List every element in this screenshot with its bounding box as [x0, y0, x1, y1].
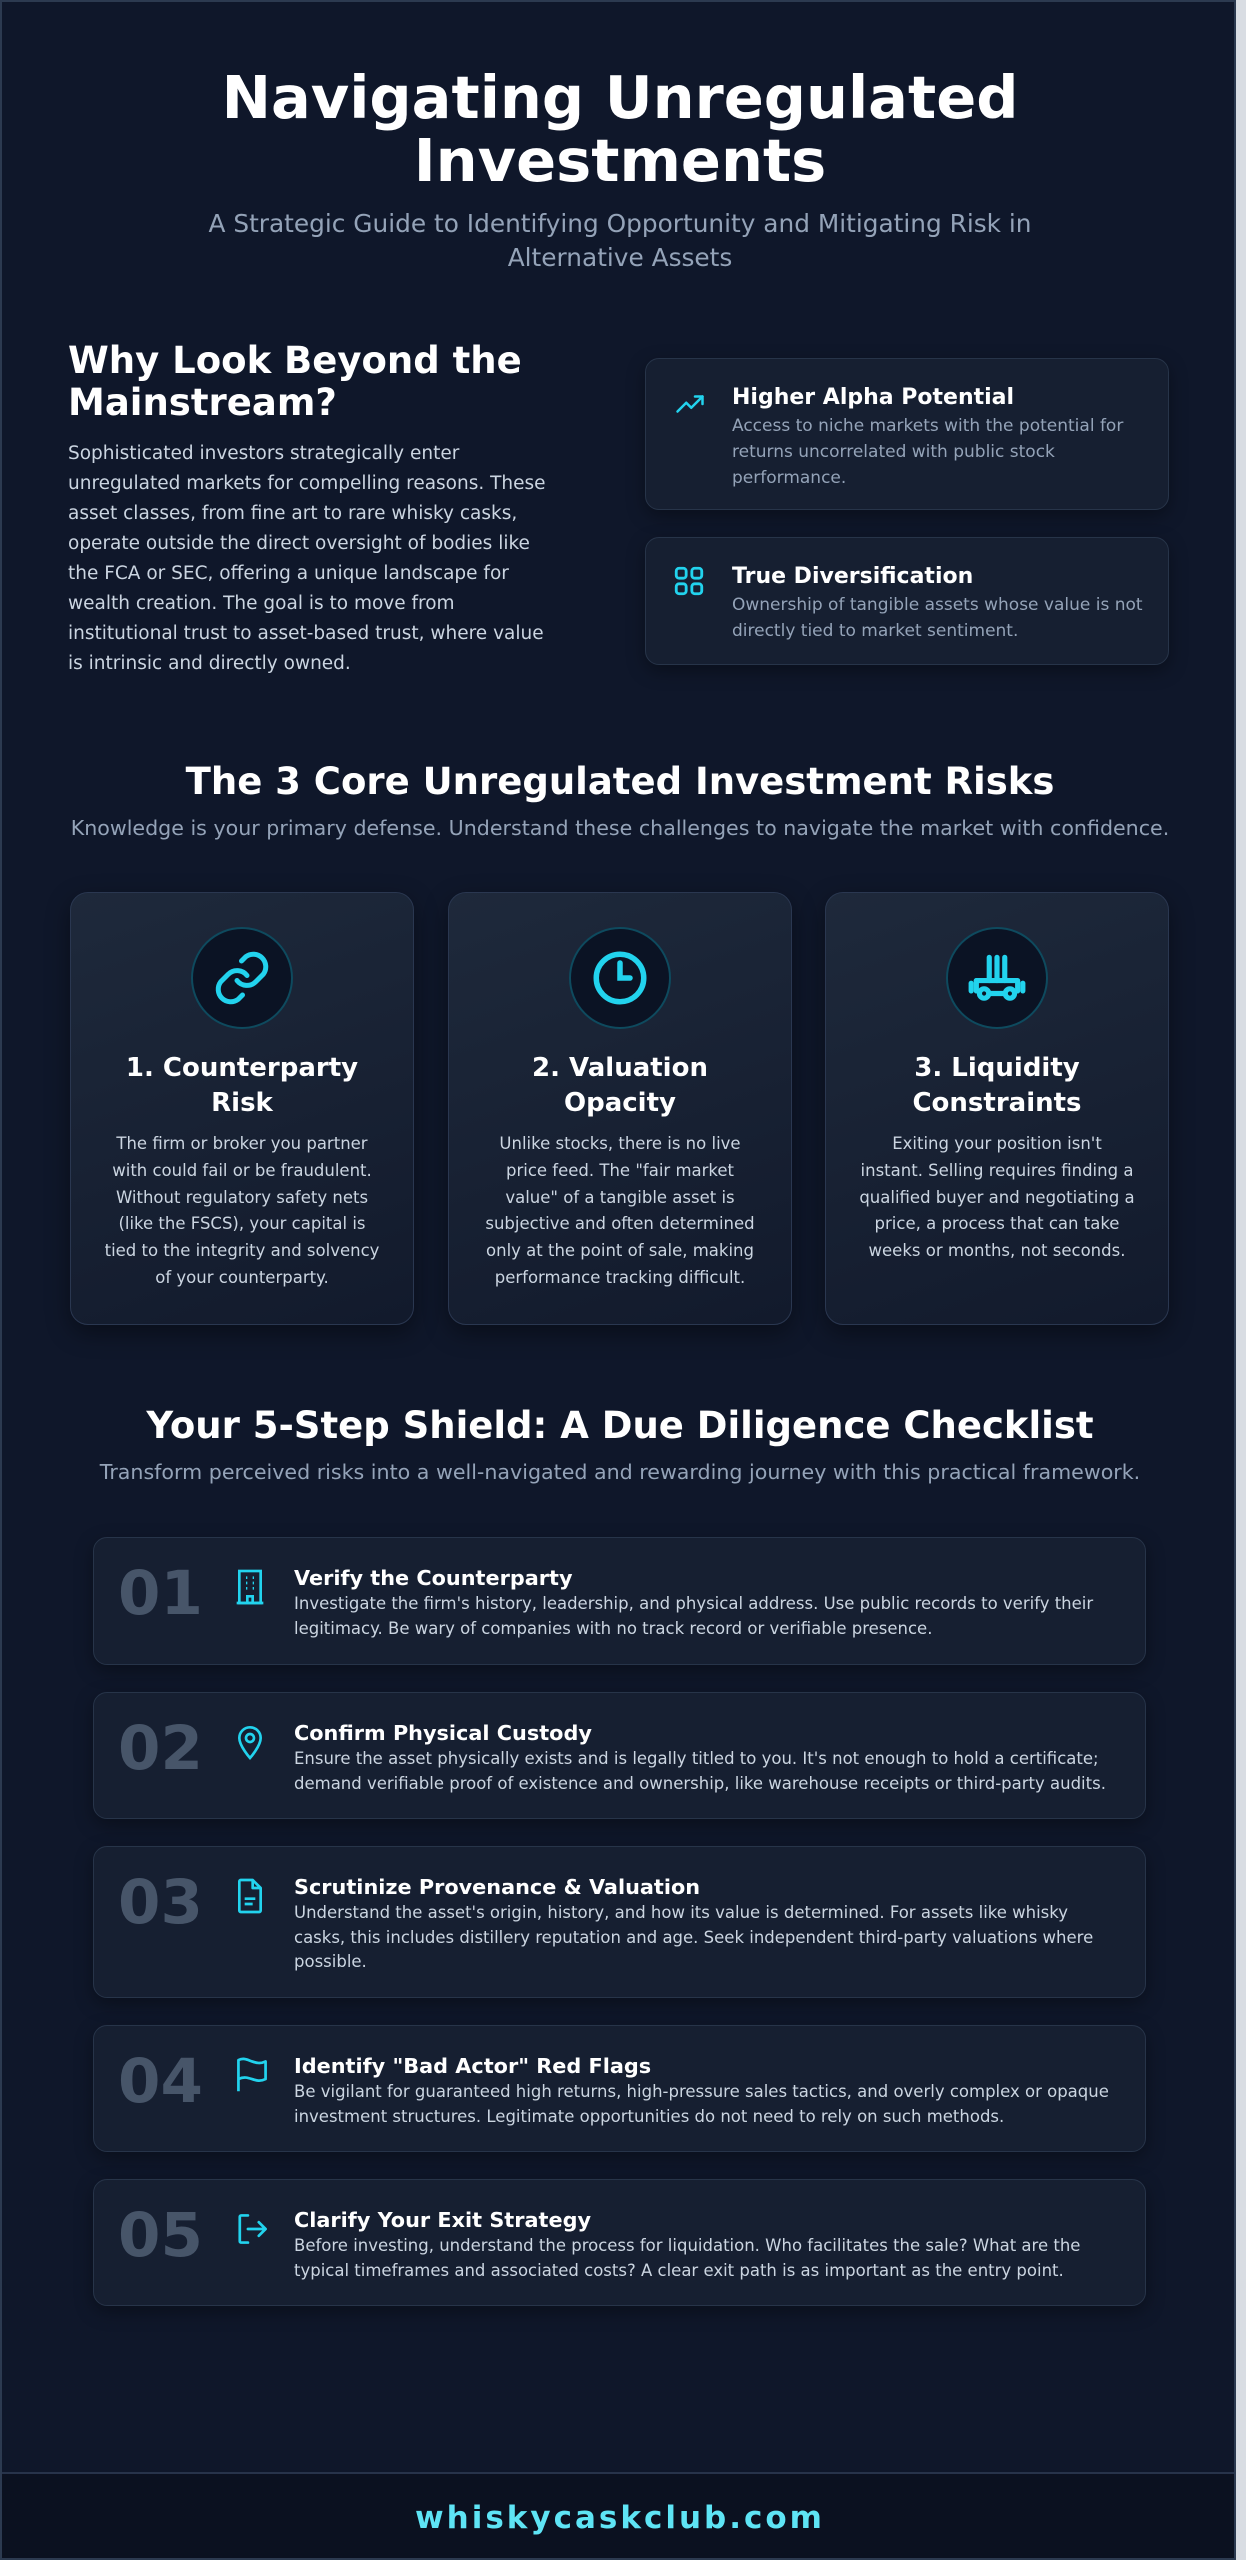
- text: Exiting your position isn't: [892, 1134, 1102, 1153]
- footer: [2, 2472, 1238, 2560]
- step 03: [93, 1846, 1146, 1998]
- icon: document: [238, 1878, 262, 1914]
- heading: 1. Counterparty: [126, 1053, 358, 1083]
- text block: intro paragraph: Sophisticated investors strategically enter unregulated markets for compelling reasons. These asset classes, from fine art to rare whisky casks, operate outside the direct oversight of bodies like the FCA or SEC, offering a unique landscape for wealth creation. The goal is to move from institutional trust to asset-based trust, where value is intrinsic and directly owned.: [68, 443, 546, 674]
- heading: Higher Alpha Potential: [732, 385, 1014, 410]
- heading: Confirm Physical Custody: [294, 1721, 592, 1745]
- text: instant. Selling requires finding a: [861, 1161, 1133, 1180]
- footer: website: whiskycaskclub.com: [415, 2500, 825, 2536]
- heading: [912, 1053, 1082, 1118]
- heading: Constraints: [912, 1088, 1082, 1118]
- text: [859, 1134, 1135, 1260]
- step 01: [93, 1537, 1146, 1665]
- text: qualified buyer and negotiating a: [859, 1188, 1135, 1207]
- heading: [532, 1053, 708, 1118]
- icon: location pin: [238, 1726, 262, 1760]
- icon: clock: [569, 927, 671, 1029]
- text: Ensure the asset physically exists and is legally titled to you. It's not enough to hold a certificate; demand verifiable proof of existence and ownership, like warehouse receipts or third-party audits.: [294, 1749, 1106, 1792]
- text: Unlike stocks, there is no live price feed. The "fair market value" of a tangible asset is subjective and often determined only at the point of sale, making performance tracking difficult.: [485, 1134, 755, 1287]
- heading: True Diversification: [732, 564, 973, 589]
- text: Understand the asset's origin, history, and how its value is determined. For assets like whisky casks, this includes distillery reputation and age. Seek independent third-party valuations where possible.: [294, 1903, 1093, 1971]
- text: Before investing, understand the process for liquidation. Who facilitates the sale? What are the typical timeframes and associated costs? A clear exit path is as important as the entry point.: [294, 2236, 1080, 2280]
- number: 01: [118, 1558, 203, 1629]
- title: [222, 63, 1018, 195]
- heading: [126, 1053, 358, 1118]
- step 04: [93, 2025, 1146, 2152]
- icon: exit: [238, 2214, 267, 2244]
- heading: 2. Valuation: [532, 1053, 708, 1083]
- icon: forklift: [946, 927, 1048, 1029]
- text: Access to niche markets with the potential for returns uncorrelated with public stock performance.: [732, 416, 1123, 488]
- number: 02: [118, 1713, 203, 1784]
- heading: 3 core risks: The 3 Core Unregulated Investment Risks: [186, 760, 1054, 803]
- heading: 5-step shield: Your 5-Step Shield: A Due Diligence Checklist: [146, 1404, 1094, 1447]
- subtitle: A Strategic Guide to Identifying Opportunity and Mitigating Risk in Alternative Assets: [208, 209, 1032, 272]
- step 02: [93, 1692, 1146, 1819]
- heading: 3. Liquidity: [914, 1053, 1080, 1083]
- number: 03: [118, 1867, 203, 1938]
- text: The firm or broker you partner with could fail or be fraudulent. Without regulatory safety nets (like the FSCS), your capital is tied to the integrity and solvency of your counterparty.: [105, 1134, 379, 1287]
- text: Be vigilant for guaranteed high returns, high-pressure sales tactics, and overly complex or opaque investment structures. Legitimate opportunities do not need to rely on such methods.: [294, 2082, 1109, 2126]
- panel: valuation opacity: [448, 892, 792, 1325]
- number: 04: [118, 2046, 203, 2117]
- icon: grid: [674, 566, 704, 596]
- heading: Scrutinize Provenance & Valuation: [294, 1875, 700, 1899]
- heading: Opacity: [564, 1088, 676, 1118]
- title: Investments: [414, 126, 826, 195]
- step 05: [93, 2179, 1146, 2306]
- number: 05: [118, 2200, 203, 2271]
- title: Navigating Unregulated: [222, 63, 1018, 132]
- text: Investigate the firm's history, leadership, and physical address. Use public records to verify their legitimacy. Be wary of companies with no track record or verifiable presence.: [294, 1594, 1093, 1638]
- heading: Identify "Bad Actor" Red Flags: [294, 2054, 651, 2078]
- heading: Risk: [211, 1088, 273, 1118]
- heading: Verify the Counterparty: [294, 1566, 573, 1590]
- icon: building: [236, 1570, 264, 1604]
- text: price, a process that can take: [875, 1214, 1119, 1233]
- subtitle: checklist: Transform perceived risks into a well-navigated and rewarding journey with this practical framework.: [100, 1460, 1140, 1484]
- panel: liquidity constraints: [825, 892, 1169, 1325]
- text: weeks or months, not seconds.: [869, 1241, 1125, 1260]
- icon: link: [191, 927, 293, 1029]
- icon: flag: [237, 2058, 267, 2092]
- panel: higher alpha: [645, 358, 1169, 510]
- icon: trend up: [676, 395, 704, 413]
- panel: diversification: [645, 537, 1169, 665]
- text: Ownership of tangible assets whose value is not directly tied to market sentiment.: [732, 595, 1143, 641]
- heading: Clarify Your Exit Strategy: [294, 2208, 591, 2232]
- subtitle: risks: Knowledge is your primary defense. Understand these challenges to navigate the market with confidence.: [71, 816, 1169, 840]
- panel: counterparty risk: [70, 892, 414, 1325]
- heading: why look beyond: Why Look Beyond the Mainstream?: [68, 339, 522, 424]
